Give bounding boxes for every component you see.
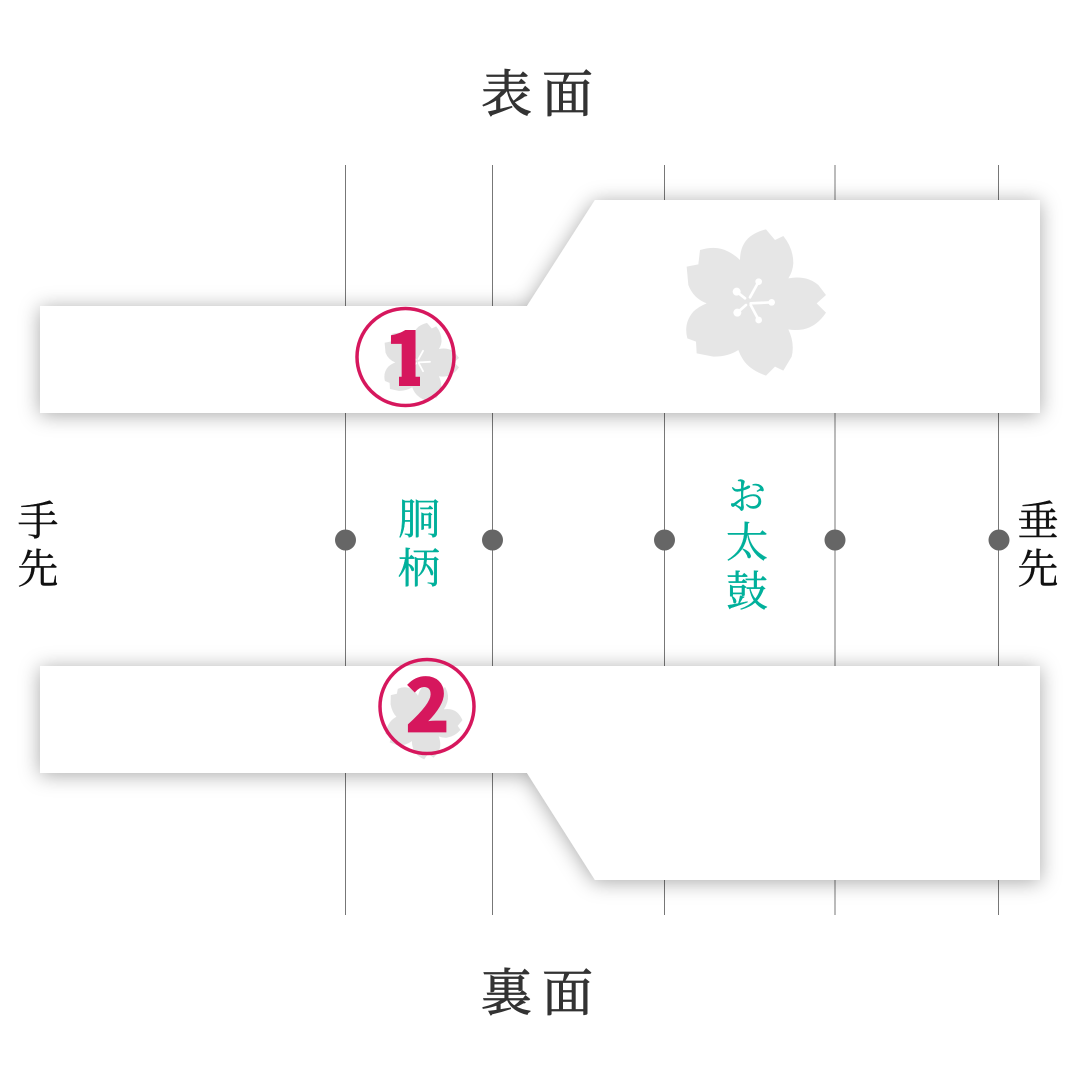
guide dots [335,530,1010,550]
vertical guide lines [346,165,998,915]
label: hand end [18,498,58,592]
label: tail end [1018,498,1058,592]
icon: small cherry blossom 1 [384,323,459,401]
title: front side: 表面 [481,68,603,124]
badge: number 1 [357,299,459,411]
label: otaiko: 鼓 [726,570,768,616]
label: tail end: 先 [1018,546,1058,592]
icon: small cherry blossom 2 [378,678,468,765]
label: tail end: 垂 [1018,498,1058,544]
label: hand end: 手 [18,498,58,544]
label: body pattern: 柄 [398,547,440,593]
badge: number 2 [378,648,474,765]
label: hand end: 先 [18,546,58,592]
panel: back obi shape [40,666,1040,880]
label: body pattern: 胴 [398,498,440,544]
label: otaiko: お [728,476,766,518]
icon: large cherry blossom [686,229,826,376]
title: back side: 裏面 [481,967,603,1023]
label: otaiko [726,476,768,616]
panel: front obi shape [40,200,1040,413]
badge: number 1: 1 [383,299,431,411]
label: otaiko: 太 [726,521,768,567]
badge: number 2: 2 [405,648,450,754]
label: body pattern [398,498,440,593]
